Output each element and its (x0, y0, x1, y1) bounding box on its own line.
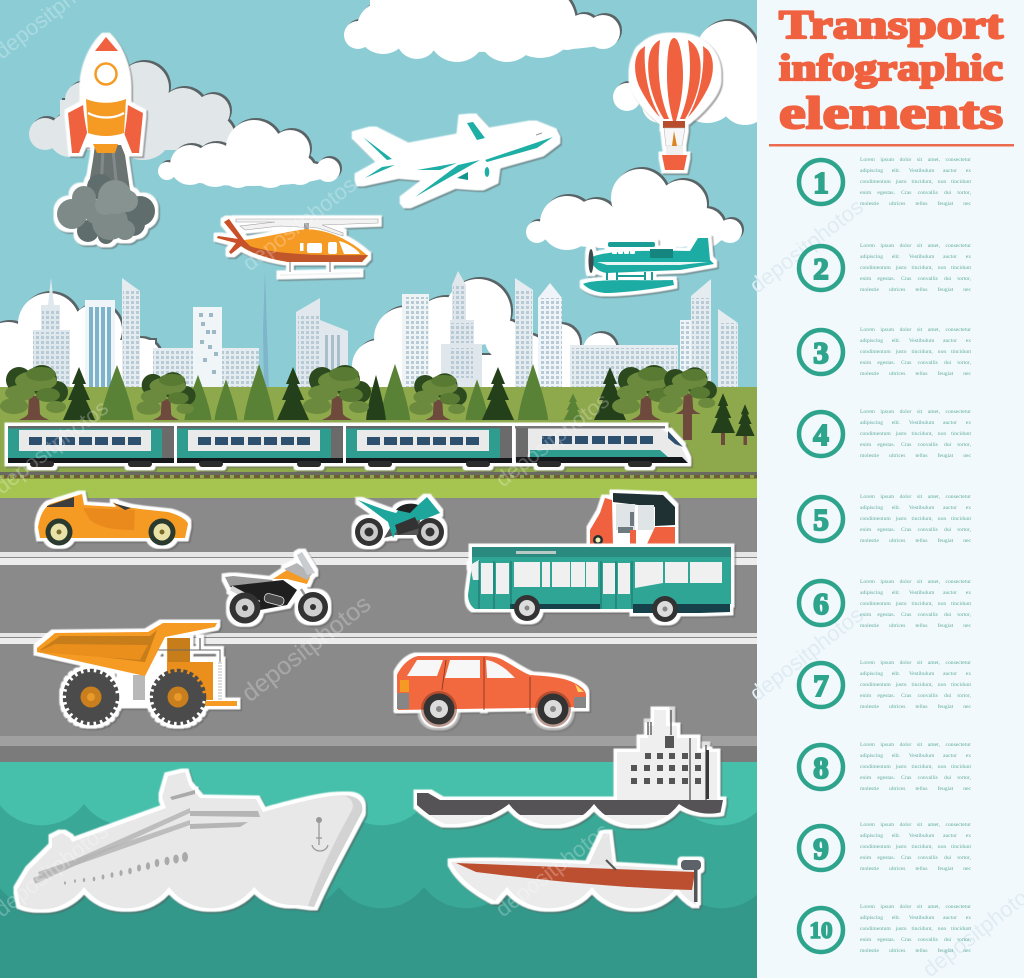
title: elements (779, 87, 1003, 138)
cloud: white left (158, 120, 340, 188)
sidebar watermarks (745, 194, 1024, 978)
number badge 2 (796, 244, 846, 292)
icon: hot air balloon (632, 36, 718, 170)
text block 8: Lorem ipsum dolor sit amet, consectetur (860, 742, 971, 748)
icon: cruise ship (17, 772, 362, 909)
number badge 4 (796, 410, 846, 458)
text block 10: adipiscing elit. Vestibulum auctor ex (860, 915, 971, 921)
icon: helicopter (217, 219, 378, 275)
icon: tuk-tuk rickshaw (590, 493, 675, 545)
sidebar background (757, 0, 1024, 978)
text block 1: molestie ultrices tellus feugiat nec (860, 201, 971, 207)
title (779, 2, 1004, 138)
text block 3: Lorem ipsum dolor sit amet, consectetur (860, 327, 971, 333)
text block 10: Lorem ipsum dolor sit amet, consectetur (860, 904, 971, 910)
sky (0, 0, 757, 390)
icon: motorbike with orange tank (225, 552, 328, 624)
cloud: right middle (526, 169, 742, 250)
number badge 7 (796, 660, 846, 710)
text block 2: Lorem ipsum dolor sit amet, consectetur (860, 243, 971, 249)
text block 10: molestie ultrices tellus feugiat nec (860, 948, 971, 954)
cloud: grey behind rocket (29, 62, 235, 160)
number badge 1 (796, 158, 846, 206)
text block 9 (860, 822, 971, 872)
text block 5: condimentum justo tincidunt, non tincidunt (860, 516, 971, 522)
icon: dump truck (37, 623, 237, 724)
text block 4: molestie ultrices tellus feugiat nec (860, 453, 971, 459)
text block 4 (860, 409, 971, 459)
text block 8 (860, 742, 971, 792)
number badge 6: 6 (813, 586, 829, 621)
number badge 7: 7 (813, 668, 829, 703)
text block 7: molestie ultrices tellus feugiat nec (860, 704, 971, 710)
text block 7: enim egestas. Cras convallis dui tortor, (860, 693, 971, 699)
text block 8: condimentum justo tincidunt, non tincidunt (860, 764, 971, 770)
text block 5 (860, 494, 971, 544)
text block 7: Lorem ipsum dolor sit amet, consectetur (860, 660, 971, 666)
cloud: top centre (344, 0, 620, 62)
watermarks (0, 0, 614, 922)
text block 3: condimentum justo tincidunt, non tincidunt (860, 349, 971, 355)
number badge 5: 5 (813, 502, 829, 537)
text block 7: adipiscing elit. Vestibulum auctor ex (860, 671, 971, 677)
text block 2: molestie ultrices tellus feugiat nec (860, 287, 971, 293)
text block 10: condimentum justo tincidunt, non tincidunt (860, 926, 971, 932)
road (0, 498, 757, 762)
text block 6 (860, 579, 971, 629)
icon: rocket (57, 36, 155, 244)
icon: seaplane (583, 238, 714, 293)
text block 3: enim egestas. Cras convallis dui tortor, (860, 360, 971, 366)
text block 2: condimentum justo tincidunt, non tincidunt (860, 265, 971, 271)
cloud: upper right behind balloon (613, 21, 770, 125)
watermarks: depositphotos (491, 388, 614, 492)
text block 9: condimentum justo tincidunt, non tincidunt (860, 844, 971, 850)
text block 4: enim egestas. Cras convallis dui tortor, (860, 442, 971, 448)
text block 9: enim egestas. Cras convallis dui tortor, (860, 855, 971, 861)
icon: motorboat (451, 833, 701, 908)
number badge 3 (796, 328, 846, 376)
text block 5: molestie ultrices tellus feugiat nec (860, 538, 971, 544)
text block 8: enim egestas. Cras convallis dui tortor, (860, 775, 971, 781)
train (8, 426, 688, 467)
watermarks: depositphotos (236, 590, 376, 708)
text block 9: molestie ultrices tellus feugiat nec (860, 866, 971, 872)
city skyline (33, 270, 738, 390)
text block 2: enim egestas. Cras convallis dui tortor, (860, 276, 971, 282)
text block 1 (860, 157, 971, 207)
watermarks: depositphotos (238, 172, 361, 276)
text block 9: adipiscing elit. Vestibulum auctor ex (860, 833, 971, 839)
text block 5: adipiscing elit. Vestibulum auctor ex (860, 505, 971, 511)
text block 4: adipiscing elit. Vestibulum auctor ex (860, 420, 971, 426)
watermarks: depositphotos (491, 818, 614, 922)
text block 2: adipiscing elit. Vestibulum auctor ex (860, 254, 971, 260)
number badge 1: 1 (813, 165, 829, 200)
green field (0, 387, 757, 473)
number badge 5 (796, 494, 846, 544)
icon: airplane (355, 117, 557, 205)
text block 4: condimentum justo tincidunt, non tincidunt (860, 431, 971, 437)
number badge 4: 4 (813, 417, 829, 452)
number badge 8 (796, 742, 846, 792)
text block 6: enim egestas. Cras convallis dui tortor, (860, 612, 971, 618)
forest (0, 364, 755, 445)
text block 8: adipiscing elit. Vestibulum auctor ex (860, 753, 971, 759)
sidebar watermarks: depositphotos (745, 602, 868, 706)
text block 10 (860, 904, 971, 954)
icon: teal motorbike (355, 497, 444, 546)
text block 1: adipiscing elit. Vestibulum auctor ex (860, 168, 971, 174)
text block 6: adipiscing elit. Vestibulum auctor ex (860, 590, 971, 596)
text block 1: enim egestas. Cras convallis dui tortor, (860, 190, 971, 196)
text block 1: condimentum justo tincidunt, non tincidunt (860, 179, 971, 185)
grass strip and rails (0, 472, 757, 499)
sidebar watermarks: depositphotos (745, 194, 868, 298)
number badge 10 (796, 906, 846, 954)
text block 3: adipiscing elit. Vestibulum auctor ex (860, 338, 971, 344)
text block 3 (860, 327, 971, 377)
text block 5: enim egestas. Cras convallis dui tortor, (860, 527, 971, 533)
number badge 2: 2 (813, 251, 829, 286)
number badge 9 (796, 824, 846, 872)
text block 6: molestie ultrices tellus feugiat nec (860, 623, 971, 629)
number badge 10: 10 (810, 918, 832, 943)
text block 5: Lorem ipsum dolor sit amet, consectetur (860, 494, 971, 500)
text block 3: molestie ultrices tellus feugiat nec (860, 371, 971, 377)
title rule (769, 144, 1014, 146)
text block 2 (860, 243, 971, 293)
number badge 6 (796, 578, 846, 628)
text block 6: condimentum justo tincidunt, non tincidunt (860, 601, 971, 607)
icon: cargo ship (417, 710, 723, 825)
cloud: city right (352, 279, 620, 392)
text block 9: Lorem ipsum dolor sit amet, consectetur (860, 822, 971, 828)
text block 1: Lorem ipsum dolor sit amet, consectetur (860, 157, 971, 163)
number badge 9: 9 (813, 831, 829, 866)
text block 6: Lorem ipsum dolor sit amet, consectetur (860, 579, 971, 585)
title: Transport (779, 2, 1004, 47)
text block 7 (860, 660, 971, 710)
icon: convertible car (38, 494, 188, 546)
text block 10: enim egestas. Cras convallis dui tortor, (860, 937, 971, 943)
text block 7: condimentum justo tincidunt, non tincidunt (860, 682, 971, 688)
number badge 8: 8 (813, 750, 829, 785)
number badge 3: 3 (813, 335, 829, 370)
text block 8: molestie ultrices tellus feugiat nec (860, 786, 971, 792)
title: infographic (779, 48, 1003, 89)
text block 4: Lorem ipsum dolor sit amet, consectetur (860, 409, 971, 415)
icon: city bus (468, 547, 731, 622)
water (0, 762, 764, 978)
cloud: city left (0, 293, 162, 390)
icon: red SUV (397, 656, 586, 727)
